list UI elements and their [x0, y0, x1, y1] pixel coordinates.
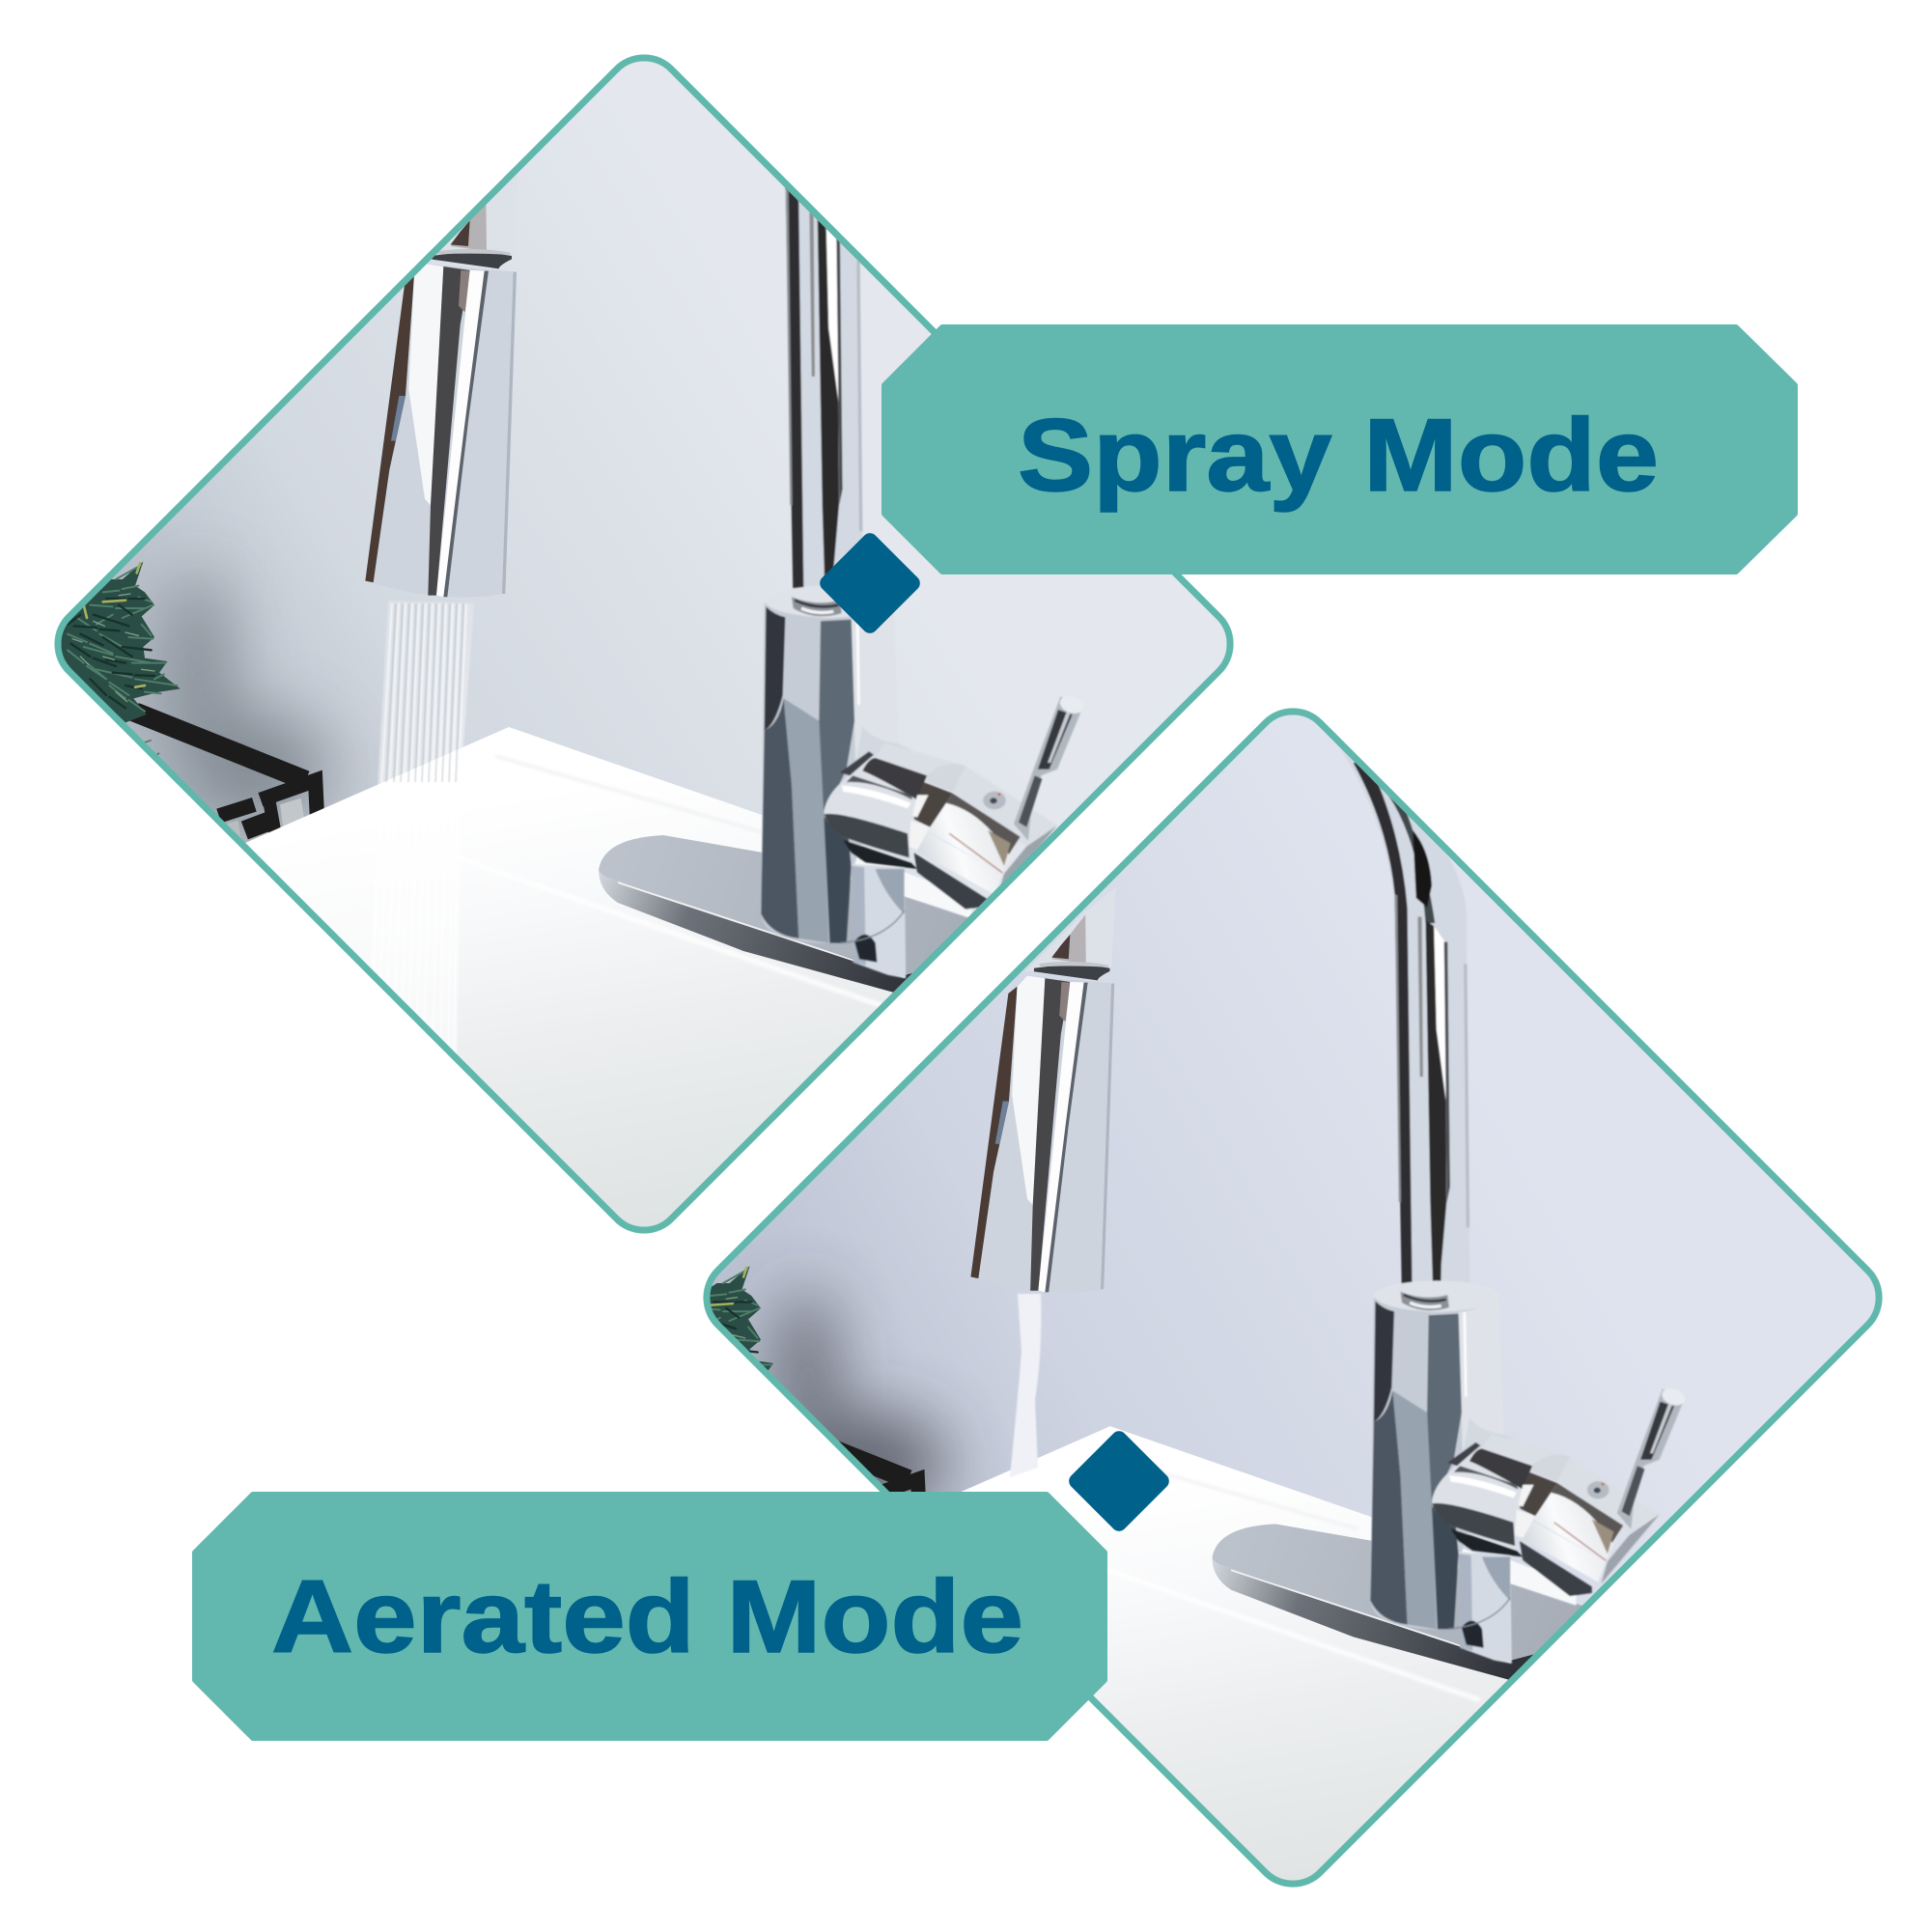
pull-down spray head	[970, 887, 1116, 1293]
faucet body	[599, 187, 1081, 993]
icon: blue diamond accent bottom	[1066, 1428, 1172, 1534]
sink	[245, 727, 894, 1226]
label: aerated mode: Aerated Mode	[271, 1558, 1023, 1674]
pull-down spray head	[365, 171, 518, 598]
label: spray mode: Spray Mode	[1018, 397, 1659, 513]
wall	[61, 62, 1226, 913]
aerated water stream	[1010, 1294, 1041, 1477]
photo border: spray mode	[42, 42, 1246, 1246]
faucet body	[1213, 713, 1688, 1707]
photo panel: aerated mode faucet	[710, 714, 1875, 1881]
plant and black frame	[670, 1266, 919, 1539]
wall shadow	[165, 570, 328, 821]
spray water	[378, 602, 473, 1050]
wall shadow	[779, 1289, 946, 1511]
plant and black frame	[61, 562, 317, 842]
icon: blue diamond accent top	[817, 530, 923, 636]
label: aerated mode	[195, 1495, 1105, 1738]
sink	[962, 1426, 1508, 1881]
label: spray mode	[884, 327, 1795, 572]
wall	[712, 714, 1875, 1606]
photo border: aerated mode	[690, 695, 1895, 1900]
photo panel: spray mode faucet	[61, 62, 1226, 1226]
